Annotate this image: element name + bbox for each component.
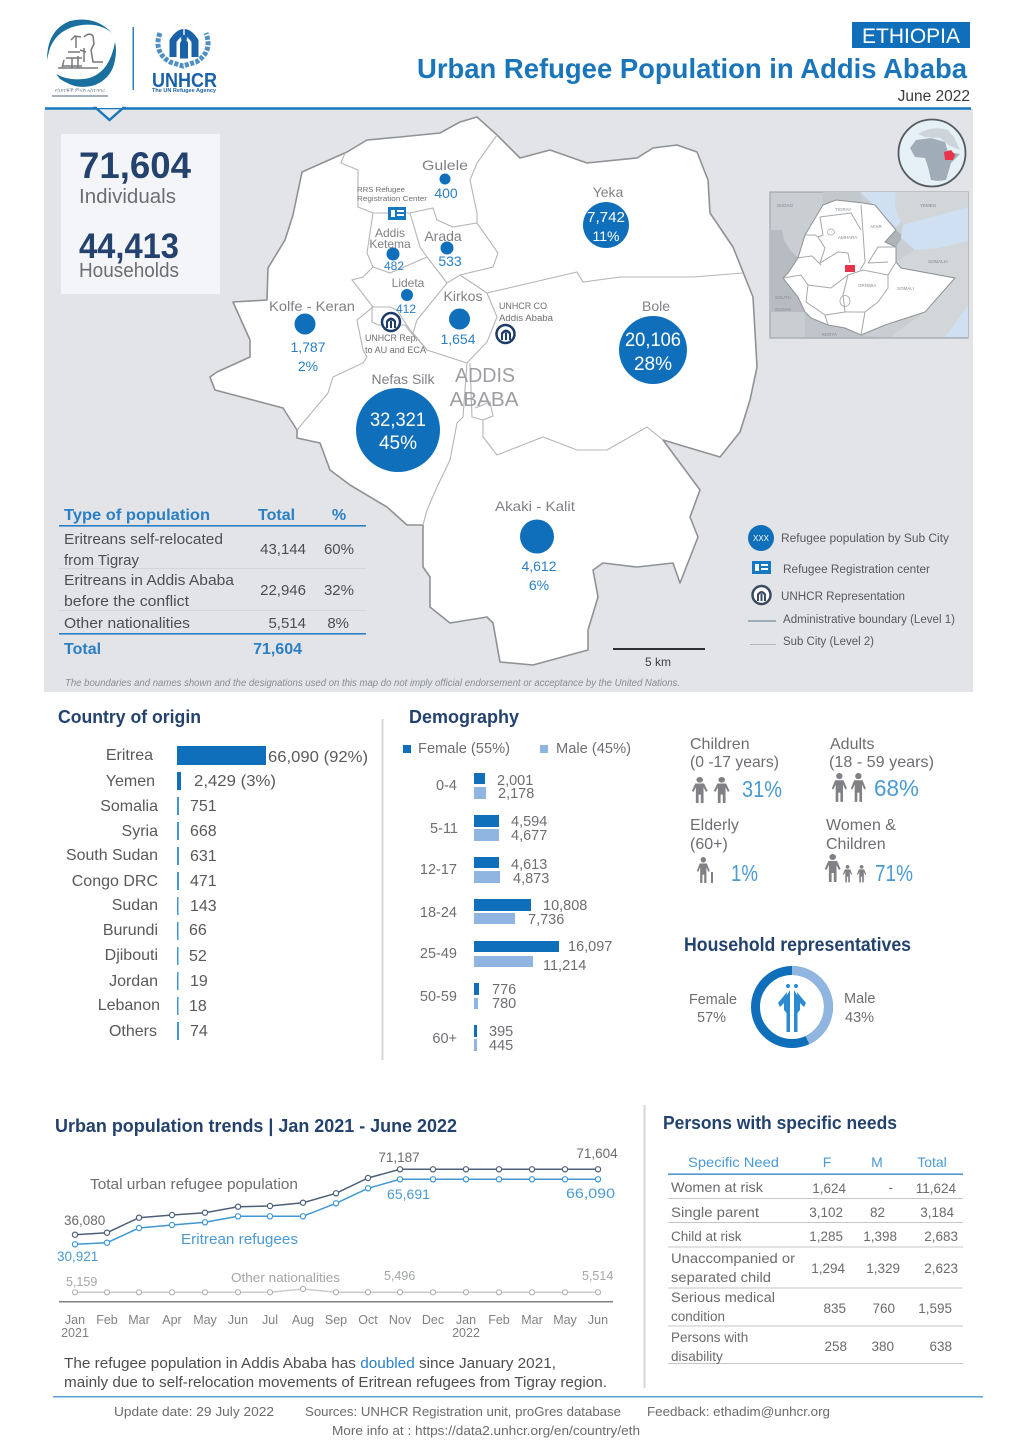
logo: UNHCR xyxy=(152,25,217,94)
stat: women and children xyxy=(825,817,913,886)
sub city: Addis Ketema: Ketema xyxy=(369,237,411,251)
age pyramid bars xyxy=(474,773,559,1051)
row: serious medical: 835 xyxy=(823,1301,846,1316)
sub city: Kolfe-Keran: 2% xyxy=(298,358,318,374)
series: total: 71,604 xyxy=(576,1146,618,1161)
header logos xyxy=(47,20,217,97)
row: child at risk: 2,683 xyxy=(924,1229,958,1244)
inset map: Ethiopia: SOUTH xyxy=(775,295,791,300)
stat: children: Children xyxy=(690,736,750,753)
age values: 4,613 xyxy=(511,857,547,873)
registration center xyxy=(357,185,428,220)
inset map: Ethiopia: KENYA xyxy=(822,332,837,337)
table header xyxy=(668,1154,963,1175)
row: serious medical: Serious medical xyxy=(671,1290,775,1305)
row: before conflict: 32% xyxy=(324,582,354,599)
country labels: Lebanon xyxy=(98,997,160,1014)
x axis: 2022 xyxy=(452,1326,480,1340)
x axis: Nov xyxy=(389,1313,412,1327)
map legend xyxy=(748,525,955,648)
update date: Update date: 29 July 2022 xyxy=(114,1404,274,1419)
scale bar xyxy=(613,648,705,669)
logo: UNHCR: The UN Refugee Agency xyxy=(152,88,217,94)
country values: 631 xyxy=(190,848,217,865)
legend: registration center xyxy=(752,561,930,576)
legend: Male (45%) xyxy=(556,741,631,757)
UNHCR representation to AU and ECA: UNHCR Rep. xyxy=(365,333,418,343)
row: unaccompanied: separated child xyxy=(671,1270,771,1285)
panel: age groups xyxy=(690,736,934,886)
sub city: Arada: 533 xyxy=(438,253,462,269)
country labels: Yemen xyxy=(106,773,155,790)
city label: ABABA xyxy=(450,389,519,411)
UNHCR representation to AU and ECA: to AU and ECA xyxy=(365,345,426,355)
UNHCR CO Addis Ababa xyxy=(496,301,553,343)
x axis: Feb xyxy=(96,1313,118,1327)
x axis: Oct xyxy=(358,1313,378,1327)
series: total xyxy=(64,1146,618,1235)
country labels: Burundi xyxy=(103,922,158,939)
sub city: Akaki-Kalit: Akaki - Kalit xyxy=(495,498,575,514)
stat: elderly: Elderly xyxy=(690,817,739,834)
country values: 66,090 (92%) xyxy=(268,749,368,766)
series: Eritrean refugees: Eritrean refugees xyxy=(181,1232,298,1248)
age values: 11,214 xyxy=(543,958,586,974)
sub city: Yeka: 11% xyxy=(593,228,619,244)
stat: elderly xyxy=(690,817,758,886)
country values: 66 xyxy=(189,922,207,939)
series: total: Total urban refugee population xyxy=(90,1177,298,1193)
series: other nationalities: Other nationalities xyxy=(231,1271,340,1285)
age labels: 18-24 xyxy=(420,905,457,921)
label: female: 57% xyxy=(697,1010,726,1026)
sub city: Nefas Silk xyxy=(356,371,440,472)
row: unaccompanied xyxy=(671,1251,958,1285)
age values: 776 xyxy=(492,982,516,998)
sub city: Gulele xyxy=(422,157,468,201)
country values: 19 xyxy=(190,973,208,990)
stat: elderly: 1% xyxy=(731,860,758,886)
inset map: Ethiopia: SUDAN xyxy=(775,307,791,312)
households: Households xyxy=(79,260,179,282)
inset map: Ethiopia: OROMIA xyxy=(858,283,876,288)
households: 44,413 xyxy=(79,227,179,266)
x axis: Feb xyxy=(488,1313,510,1327)
stat: children: (0 -17 years) xyxy=(690,754,779,771)
x axis: Jan xyxy=(456,1313,476,1327)
stat: adults xyxy=(829,736,934,802)
inset map: Ethiopia: SUDAN xyxy=(777,203,793,208)
legend: level 2: Sub City (Level 2) xyxy=(783,636,874,648)
disclaimer: The boundaries and names shown and the designations used on this map do not imply official endorsement or acceptance by the United Nations. xyxy=(65,678,680,689)
row: women at risk xyxy=(671,1180,956,1196)
logo: refugee response ring: የስደተኞች ምላሽ አስተባባሪ xyxy=(55,88,105,94)
age labels: 60+ xyxy=(432,1031,457,1047)
heading: Household representatives xyxy=(684,935,911,956)
age values: 445 xyxy=(489,1038,513,1054)
sub city: Akaki-Kalit: 6% xyxy=(529,577,549,593)
label: male: 43% xyxy=(845,1010,874,1026)
legend: population: Refugee population by Sub City xyxy=(781,533,949,545)
map: Addis Ababa sub cities xyxy=(210,117,757,665)
row: serious medical: condition xyxy=(671,1309,725,1324)
UNHCR CO Addis Ababa: UNHCR CO xyxy=(499,301,547,311)
stat: adults: (18 - 59 years) xyxy=(829,754,934,771)
sub city: Nefas Silk: 45% xyxy=(379,433,417,454)
sub city: Addis Ketema: Addis xyxy=(375,226,405,240)
age labels: 12-17 xyxy=(420,862,457,878)
inset map: Ethiopia: YEMEN xyxy=(920,203,936,208)
registration center: Registration Center xyxy=(357,194,428,203)
country values: 668 xyxy=(190,823,217,840)
row: serious medical xyxy=(671,1290,952,1324)
row: unaccompanied: 1,294 xyxy=(811,1261,845,1276)
chart note: mainly due to self-relocation movements of Eritrean refugees from Tigray region. xyxy=(64,1375,607,1391)
series: total: 71,187 xyxy=(378,1150,420,1165)
x axis: Sep xyxy=(325,1313,347,1327)
sources: Sources: UNHCR Registration unit, proGres database xyxy=(305,1404,621,1419)
x axis: Jul xyxy=(262,1313,278,1327)
stat: elderly: (60+) xyxy=(690,836,728,853)
legend xyxy=(403,741,631,757)
row: other nationalities: Other nationalities xyxy=(64,615,190,632)
sub city: Bole xyxy=(619,298,687,384)
x axis: Jan xyxy=(65,1313,85,1327)
legend: registration center: Refugee Registration center xyxy=(783,564,930,576)
x axis: Mar xyxy=(521,1313,543,1327)
sub city: Kolfe-Keran: Kolfe - Keran xyxy=(269,298,355,314)
sub city: Bole: Bole xyxy=(642,298,670,314)
stat: women and children: Women & xyxy=(826,817,896,834)
country values: 143 xyxy=(190,898,217,915)
row: self-relocated xyxy=(64,531,354,569)
age labels: 25-49 xyxy=(420,946,457,962)
row: other nationalities: 5,514 xyxy=(268,615,306,632)
needs table xyxy=(668,1154,963,1364)
legend: Female (55%) xyxy=(418,741,510,757)
individuals: 71,604 xyxy=(79,145,191,186)
sub city: Kirkos: 1,654 xyxy=(440,331,476,347)
sub city: Lideta xyxy=(392,276,425,316)
row: disability: disability xyxy=(671,1349,723,1364)
sub city: Addis Ketema xyxy=(369,226,411,273)
city label: ADDIS xyxy=(455,365,515,387)
row: unaccompanied: 1,329 xyxy=(866,1261,900,1276)
row: disability: 638 xyxy=(929,1339,952,1354)
country labels: Sudan xyxy=(112,897,158,914)
age values: 7,736 xyxy=(528,912,564,928)
city label xyxy=(450,365,519,411)
sub city: Bole: 20,106 xyxy=(625,330,681,351)
sub city: Bole: 28% xyxy=(634,354,672,375)
country values: 74 xyxy=(190,1023,208,1040)
country labels: South Sudan xyxy=(66,847,158,864)
row: self-relocated: Eritreans self-relocated xyxy=(64,531,223,548)
country values xyxy=(189,749,368,1040)
sub city: Yeka: 7,742 xyxy=(587,209,625,226)
sub city: Kolfe-Keran: 1,787 xyxy=(290,339,326,355)
stat: women and children: Children xyxy=(826,836,886,853)
country labels xyxy=(66,747,160,1040)
chart note xyxy=(64,1356,607,1391)
donut chart xyxy=(756,970,828,1044)
legend: population xyxy=(748,525,949,551)
inset map: Ethiopia: SOMALIA xyxy=(928,259,948,264)
label: female: Female xyxy=(689,992,737,1008)
inset map: Ethiopia: AMHARA xyxy=(838,235,857,240)
UNHCR CO Addis Ababa: Addis Ababa xyxy=(499,313,553,323)
series: Eritrean refugees: 30,921 xyxy=(57,1249,98,1264)
row: child at risk: 1,285 xyxy=(809,1229,843,1244)
row: single parent: 3,102 xyxy=(809,1205,843,1220)
age values: 4,873 xyxy=(513,871,549,887)
sub city: Nefas Silk: 32,321 xyxy=(370,410,426,431)
x axis: Jun xyxy=(228,1313,248,1327)
legend: level 1: Administrative boundary (Level 1) xyxy=(783,614,955,626)
series: Eritrean refugees: 66,090 xyxy=(566,1186,615,1201)
age values: 16,097 xyxy=(568,939,612,955)
country values: 2,429 (3%) xyxy=(194,773,276,790)
stat: adults: Adults xyxy=(830,736,874,753)
row: single parent: 82 xyxy=(870,1205,885,1220)
row: unaccompanied: 2,623 xyxy=(924,1261,958,1276)
UNHCR representation to AU and ECA xyxy=(365,313,426,355)
sub city: Lideta: 412 xyxy=(396,302,416,316)
row: serious medical: 1,595 xyxy=(918,1301,952,1316)
date: June 2022 xyxy=(898,88,970,105)
row: before conflict: Eritreans in Addis Ababa xyxy=(64,572,235,589)
country values: 751 xyxy=(190,798,217,815)
age labels: 0-4 xyxy=(436,778,457,794)
Ethiopia xyxy=(783,200,955,335)
country values: 471 xyxy=(190,873,217,890)
table header: F xyxy=(823,1154,831,1170)
label: male: Male xyxy=(844,991,875,1007)
heading: Urban population trends | Jan 2021 - June 2022 xyxy=(55,1116,457,1136)
row: self-relocated: 60% xyxy=(324,541,354,558)
panel: household representatives xyxy=(684,935,911,1044)
registration center: RRS Refugee xyxy=(357,185,405,194)
country values: 52 xyxy=(189,948,207,965)
row: child at risk xyxy=(671,1229,958,1244)
heading: Country of origin xyxy=(58,707,201,727)
x axis: May xyxy=(553,1313,578,1327)
age values: 4,677 xyxy=(511,828,547,844)
title: Urban Refugee Population in Addis Ababa xyxy=(417,53,967,84)
country labels: Djibouti xyxy=(105,947,158,964)
table header: % xyxy=(332,507,346,524)
x axis: Jun xyxy=(588,1313,608,1327)
title block xyxy=(417,22,970,105)
sub city: Kirkos xyxy=(440,288,482,347)
inset map: Ethiopia: AFAR xyxy=(870,224,883,229)
inset map: Ethiopia: SOMALI xyxy=(897,286,914,291)
bar chart: countries xyxy=(66,746,368,1040)
heading: Persons with specific needs xyxy=(663,1113,897,1133)
sub city: Nefas Silk: Nefas Silk xyxy=(371,371,436,387)
divider xyxy=(132,27,134,90)
row: disability xyxy=(671,1330,952,1364)
series: other nationalities: 5,496 xyxy=(384,1269,415,1283)
panel: demography xyxy=(403,707,631,1054)
row: disability: 258 xyxy=(824,1339,847,1354)
row: single parent xyxy=(671,1205,954,1220)
legend: representation: UNHCR Representation xyxy=(781,591,905,603)
table header xyxy=(59,507,366,527)
row: women at risk: Women at risk xyxy=(671,1180,763,1195)
row: women at risk: 1,624 xyxy=(812,1181,846,1196)
row: self-relocated: from Tigray xyxy=(64,552,140,569)
header rule with notch xyxy=(45,106,971,120)
panel: persons with specific needs xyxy=(663,1113,963,1364)
age labels: 50-59 xyxy=(420,989,457,1005)
sub city: Addis Ketema: 482 xyxy=(384,259,404,273)
sub city: Yeka: Yeka xyxy=(593,184,624,200)
row: child at risk: 1,398 xyxy=(863,1229,897,1244)
sub city: Yeka xyxy=(583,184,629,248)
sub city: Gulele: 400 xyxy=(434,185,458,201)
stat: women and children: 71% xyxy=(875,860,913,886)
series: Eritrean refugees: 65,691 xyxy=(387,1187,430,1202)
country labels: Somalia xyxy=(100,798,158,815)
series: other nationalities xyxy=(66,1269,613,1292)
stat: children xyxy=(690,736,782,803)
series: Eritrean refugees xyxy=(57,1179,615,1264)
age values: 4,594 xyxy=(511,814,547,830)
series: other nationalities: 5,159 xyxy=(66,1275,97,1289)
stat: adults: 68% xyxy=(874,775,919,801)
panel: urban population trends xyxy=(55,1116,618,1391)
sub city: Akaki-Kalit: 4,612 xyxy=(521,558,557,574)
country values: 18 xyxy=(189,998,207,1015)
table header: Type of population xyxy=(64,507,210,524)
seas xyxy=(860,192,968,337)
row: serious medical: 760 xyxy=(872,1301,895,1316)
stats box xyxy=(61,134,220,294)
globe locator xyxy=(898,120,966,186)
chart note: The refugee population in Addis Ababa has doubled since January 2021, xyxy=(64,1356,556,1372)
neighbours xyxy=(770,230,805,312)
more info: More info at : https://data2.unhcr.org/en/country/eth xyxy=(332,1423,640,1438)
country labels: Syria xyxy=(122,823,158,840)
x axis: Aug xyxy=(292,1313,314,1327)
inset map: Ethiopia xyxy=(770,192,968,338)
country labels: Congo DRC xyxy=(72,873,158,890)
population type table xyxy=(59,507,366,658)
legend: population: XXX xyxy=(753,534,770,543)
row: women at risk: - xyxy=(888,1180,893,1195)
logo: refugee response ring xyxy=(47,20,116,97)
x axis xyxy=(59,1301,613,1340)
sub city: Kirkos: Kirkos xyxy=(444,288,482,304)
age labels xyxy=(420,778,458,1047)
sub city: Arada xyxy=(424,228,462,269)
sub city: Lideta: Lideta xyxy=(392,276,425,290)
sub city: Kolfe-Keran xyxy=(269,298,355,374)
footer xyxy=(53,1396,983,1438)
inset map: Ethiopia: TIGRAY xyxy=(835,207,851,212)
feedback: Feedback: ethadim@unhcr.org xyxy=(647,1404,830,1419)
panel: country of origin xyxy=(58,707,368,1040)
label: male xyxy=(844,991,875,1026)
table header: Specific Need xyxy=(688,1154,779,1170)
line chart xyxy=(57,1146,618,1340)
series: total: 36,080 xyxy=(64,1213,105,1228)
total row xyxy=(64,641,302,658)
x axis: May xyxy=(193,1313,218,1327)
map panel xyxy=(44,106,973,692)
row: before conflict xyxy=(64,572,354,610)
icon: man and woman xyxy=(778,984,806,1032)
households xyxy=(79,227,179,282)
x axis: Mar xyxy=(128,1313,150,1327)
row: single parent: Single parent xyxy=(671,1205,759,1220)
row: single parent: 3,184 xyxy=(920,1205,954,1220)
age values: 10,808 xyxy=(543,898,587,914)
table header: M xyxy=(871,1154,883,1170)
row: before conflict: 22,946 xyxy=(260,582,306,599)
total row: Total xyxy=(64,641,101,658)
age values: 395 xyxy=(489,1024,513,1040)
individuals xyxy=(79,145,191,208)
sub city: Arada: Arada xyxy=(424,228,462,244)
table header: Total xyxy=(258,507,295,524)
label: female xyxy=(689,992,737,1026)
stat: children: 31% xyxy=(742,776,782,802)
row: unaccompanied: Unaccompanied or xyxy=(671,1251,796,1266)
sub city: Gulele: Gulele xyxy=(422,157,468,173)
age values: 780 xyxy=(492,996,516,1012)
age values: 2,178 xyxy=(498,786,534,802)
x axis: 2021 xyxy=(61,1326,89,1340)
country labels: Others xyxy=(109,1023,157,1040)
heading: Demography xyxy=(409,707,519,727)
row: disability: Persons with xyxy=(671,1330,748,1345)
row: other nationalities xyxy=(59,568,366,635)
row: before conflict: before the conflict xyxy=(64,593,190,610)
row: women at risk: 11,624 xyxy=(916,1181,956,1196)
x axis: Dec xyxy=(422,1313,444,1327)
individuals: Individuals xyxy=(79,186,176,208)
sub city: Akaki-Kalit xyxy=(495,498,575,593)
series: other nationalities: 5,514 xyxy=(582,1269,613,1283)
total row: 71,604 xyxy=(253,641,302,658)
legend: representation xyxy=(752,586,905,604)
x axis: Apr xyxy=(162,1313,182,1327)
scale bar: 5 km xyxy=(645,655,671,669)
row: child at risk: Child at risk xyxy=(671,1229,742,1244)
country labels: Jordan xyxy=(109,973,158,990)
logo: UNHCR: UNHCR xyxy=(152,69,217,92)
age values: 2,001 xyxy=(497,773,533,789)
row: disability: 380 xyxy=(871,1339,894,1354)
age labels: 5-11 xyxy=(430,821,458,837)
country tag: ETHIOPIA xyxy=(862,25,960,48)
row: other nationalities: 8% xyxy=(327,615,349,632)
row: self-relocated: 43,144 xyxy=(260,541,306,558)
table header: Total xyxy=(917,1154,947,1170)
country labels: Eritrea xyxy=(106,747,153,764)
age values xyxy=(489,773,612,1054)
